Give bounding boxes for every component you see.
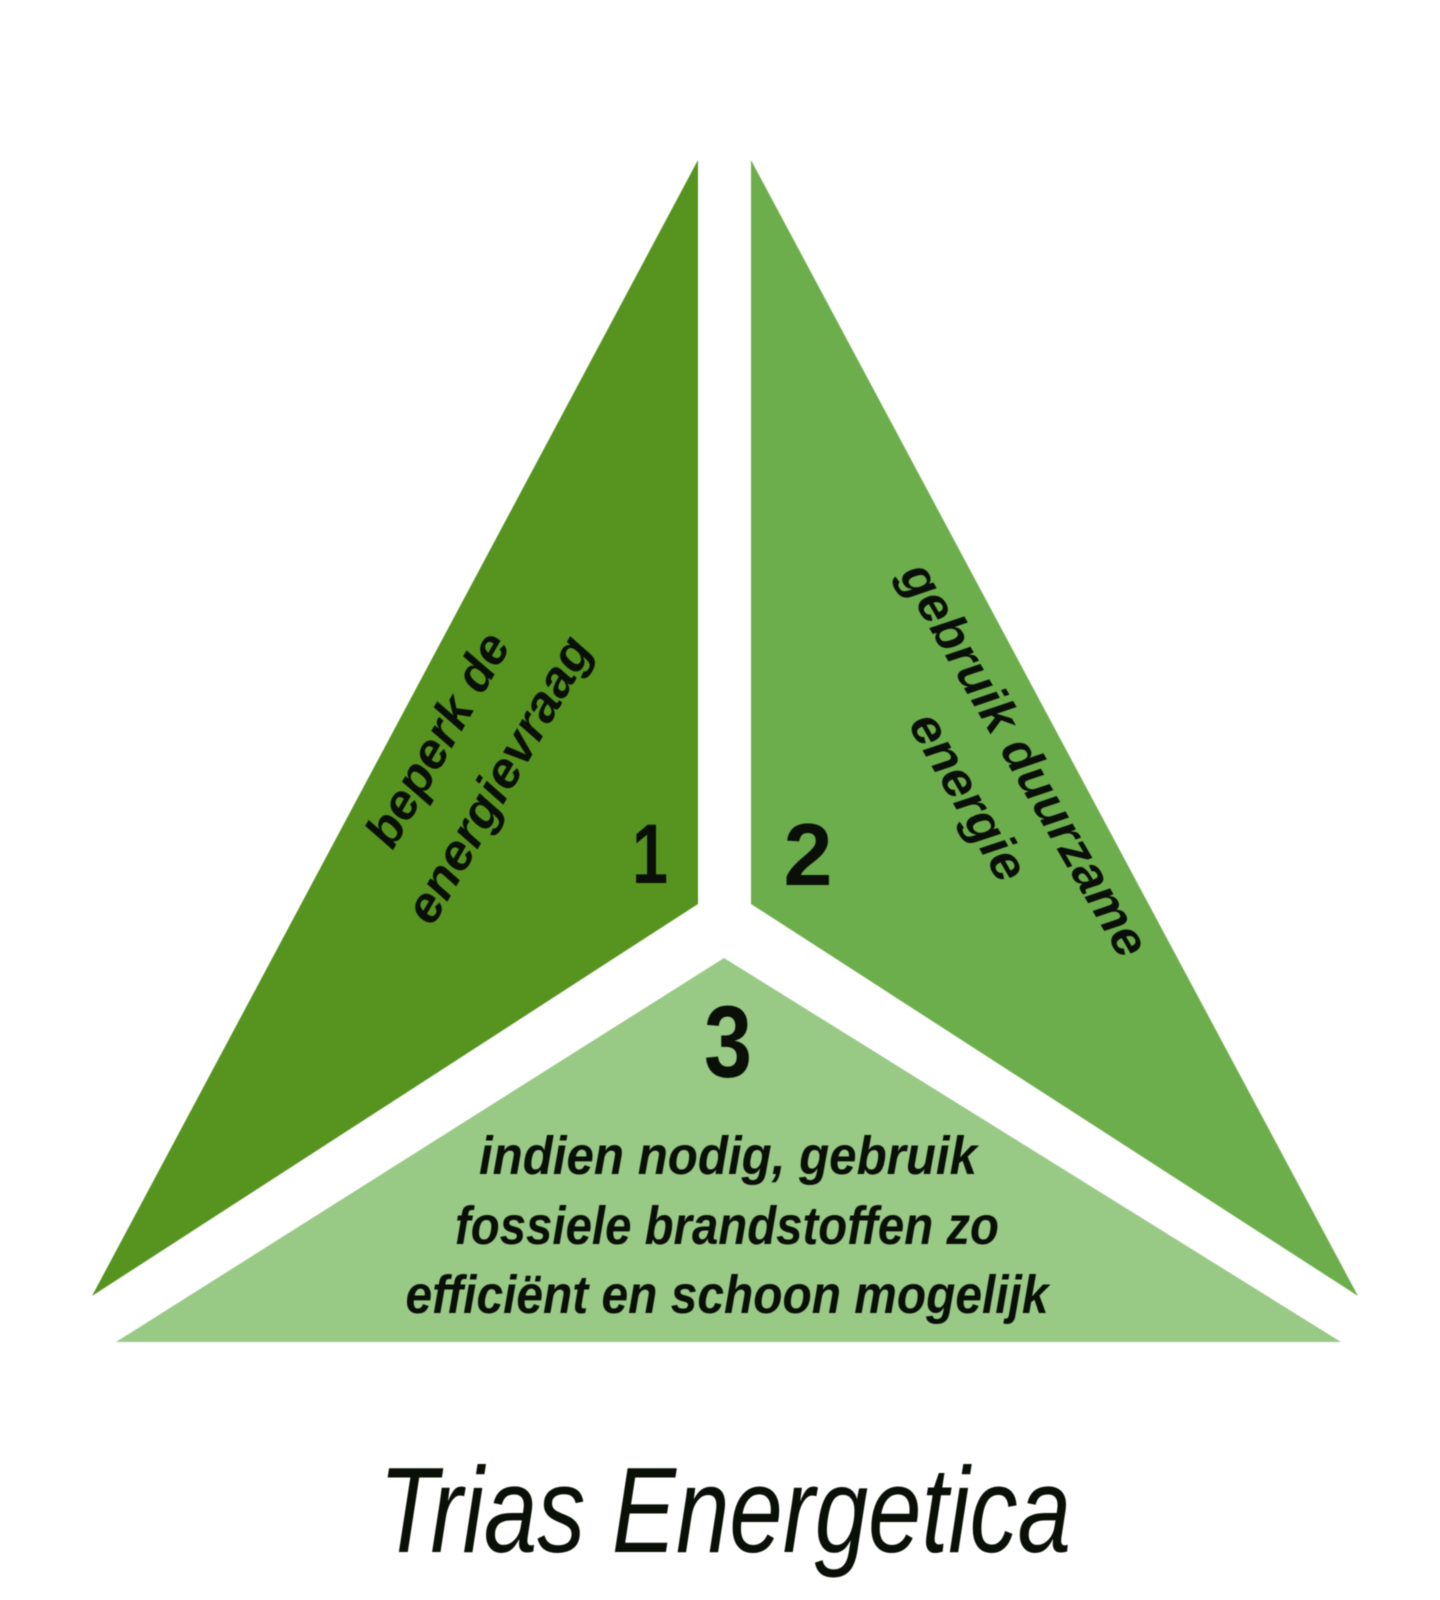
label: gebruik duurzame energie: gebruik duurzame [888,551,1160,967]
label: indien nodig, gebruik fossiele brandstoffen: efficiënt en schoon mogelijk [406,1265,1051,1325]
number 3: 3 [704,985,752,1099]
panel 2: gebruik duurzame energie [751,160,1358,1296]
label: indien nodig, gebruik fossiele brandstoffen: fossiele brandstoffen zo [455,1196,999,1256]
label: indien nodig, gebruik fossiele brandstoffen [406,1126,1051,1325]
label: beperk de energievraag: beperk de [354,622,521,857]
title: Trias Energetica [379,1442,1071,1578]
label: beperk de energievraag: energievraag [394,626,603,933]
number 2: 2 [784,805,832,904]
label: indien nodig, gebruik fossiele brandstoffen: indien nodig, gebruik [479,1126,980,1186]
number 1: 1 [632,807,668,901]
panel 1: beperk de energievraag [92,160,698,1296]
panel 3: fossiele brandstoffen [116,958,1341,1342]
label: gebruik duurzame energie: energie [898,702,1039,891]
